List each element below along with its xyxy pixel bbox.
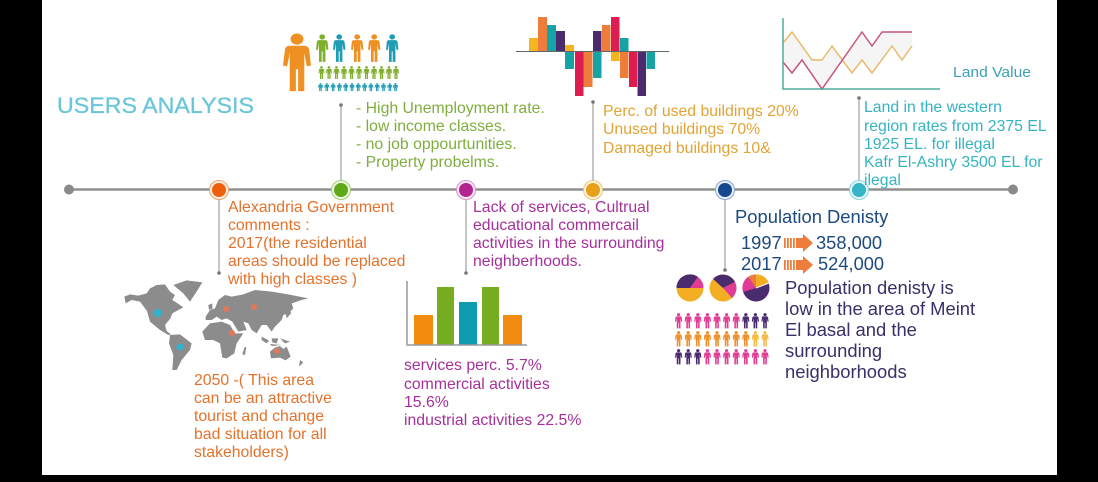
icon: world map	[124, 280, 308, 370]
text: land rates: Kafr El-Ashry 3500 EL for	[864, 154, 1043, 171]
text: 2050 vision: stakeholders)	[194, 444, 289, 461]
text: land rates: Land in the western	[864, 99, 1002, 116]
text: lack of services: neighberhoods.	[473, 253, 582, 270]
label: land value: Land Value	[953, 64, 1031, 81]
text: 2050 vision: 2050 -( This area	[194, 372, 314, 389]
text: population figures: 524,000	[818, 253, 884, 274]
text: 2050 vision: tourist and change	[194, 408, 324, 425]
text: population note: low in the area of Meint	[785, 298, 975, 319]
text: social issues: - low income classes.	[356, 118, 506, 135]
text: lack of services	[473, 199, 664, 270]
text: government comments: areas should be replaced	[228, 253, 405, 270]
chart: bar chart	[407, 281, 527, 345]
text: government comments: with high classes )	[227, 271, 357, 288]
timeline	[64, 96, 1018, 275]
icon: people group	[283, 33, 399, 91]
text: population figures: 2017	[741, 253, 782, 274]
text: land rates: ilegal	[864, 172, 901, 189]
title: USERS ANALYSIS	[57, 93, 254, 118]
text: land rates	[864, 99, 1047, 189]
text: activity percentages: 15.6%	[404, 394, 449, 411]
text: government comments: 2017(the residential	[228, 235, 367, 252]
icon: arrow 2017	[784, 256, 813, 274]
text: buildings	[603, 103, 799, 157]
icon: arrow 1997	[784, 234, 813, 252]
text: buildings: Damaged buildings 10&	[603, 140, 771, 157]
text: social issues: - Property probelms.	[356, 154, 499, 171]
text: buildings: Perc. of used buildings 20%	[603, 103, 799, 120]
text: social issues	[356, 100, 545, 171]
text: population figures: 358,000	[816, 232, 882, 253]
text: 2050 vision: bad situation for all	[194, 426, 327, 443]
text: 2050 vision: can be an attractive	[194, 390, 332, 407]
text: activity percentages: industrial activities 22.5%	[404, 412, 581, 429]
text: activity percentages	[404, 357, 581, 429]
text: population figures	[741, 232, 884, 274]
text: government comments: comments :	[228, 217, 310, 234]
text: lack of services: activities in the surrounding	[473, 235, 664, 252]
text: population heading: Population Denisty	[735, 206, 889, 227]
text: lack of services: Lack of services, Cultrual	[473, 199, 649, 216]
text: population note	[785, 277, 975, 382]
text: population note: neighborhoods	[785, 361, 907, 382]
text: buildings: Unused buildings 70%	[603, 121, 760, 138]
text: land rates: 1925 EL. for illegal	[864, 136, 995, 153]
text: lack of services: educational commercail	[473, 217, 639, 234]
text: social issues: - High Unemployment rate.	[356, 100, 545, 117]
text: land rates: region rates from 2375 EL	[864, 118, 1047, 135]
text: population note: El basal and the	[785, 319, 917, 340]
text: activity percentages: commercial activities	[404, 376, 550, 393]
text: 2050 vision	[194, 372, 332, 461]
icon: population pictogram	[675, 313, 769, 364]
text: population note: surrounding	[785, 340, 882, 361]
text: government comments: Alexandria Government	[228, 199, 395, 216]
text: population figures: 1997	[741, 232, 782, 253]
chart: diverging bars	[516, 17, 669, 96]
chart: land value lines	[783, 18, 940, 89]
text: population note: Population denisty is	[785, 277, 954, 298]
icon: pie charts	[676, 274, 770, 302]
text: government comments	[227, 199, 405, 288]
text: activity percentages: services perc. 5.7%	[404, 357, 542, 374]
text: social issues: - no job oppourtunities.	[356, 136, 517, 153]
